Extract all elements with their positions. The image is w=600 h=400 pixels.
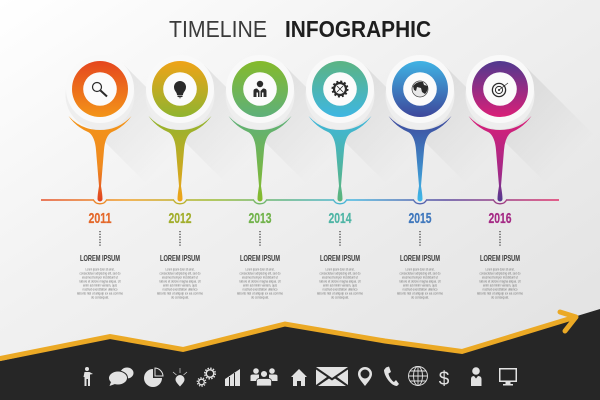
icon: magnifier bbox=[92, 82, 107, 96]
icon: light bulb bbox=[174, 81, 186, 98]
icon: gears bbox=[197, 368, 215, 386]
column 2014: consectetuer adipiscing elit, sed do bbox=[320, 272, 361, 276]
column 2012: do consequat. bbox=[171, 296, 189, 300]
title bbox=[169, 16, 431, 42]
column 2015: Lorem ipsum dolor sit amet, bbox=[406, 268, 435, 272]
column 2014 bbox=[317, 210, 363, 300]
icon: monitor bbox=[499, 368, 517, 386]
column 2012: eiusmod tempor incididunt ut bbox=[162, 276, 198, 280]
marker 2015 bbox=[386, 55, 454, 202]
column 2015: eiusmod tempor incididunt ut bbox=[402, 276, 438, 280]
column 2012: 2012 bbox=[168, 210, 192, 227]
icon: business person bbox=[254, 81, 266, 97]
column 2011: 2011 bbox=[88, 210, 112, 227]
column 2013: LOREM IPSUM bbox=[240, 253, 280, 263]
column 2013: eiusmod tempor incididunt ut bbox=[242, 276, 278, 280]
marker 2011 bbox=[66, 55, 134, 202]
column 2015: labore et dolore magna aliqua. Ut bbox=[400, 280, 441, 284]
column 2015: enim ad minim veniam, quis bbox=[403, 284, 437, 288]
column 2012: Lorem ipsum dolor sit amet, bbox=[166, 268, 195, 272]
column 2014: 2014 bbox=[328, 210, 352, 227]
icon: gear bbox=[332, 81, 348, 97]
title: TIMELINE bbox=[169, 16, 267, 42]
column 2015: laboris nisi ut aliquip ex ea commo bbox=[397, 292, 443, 296]
column 2016: laboris nisi ut aliquip ex ea commo bbox=[477, 292, 523, 296]
column 2011: labore et dolore magna aliqua. Ut bbox=[80, 280, 121, 284]
footer icon row bbox=[84, 366, 517, 390]
column 2012: consectetuer adipiscing elit, sed do bbox=[160, 272, 201, 276]
icon: location pin bbox=[358, 367, 372, 386]
column 2013: 2013 bbox=[248, 210, 272, 227]
column 2016: 2016 bbox=[488, 210, 512, 227]
column 2016 bbox=[477, 210, 523, 300]
icon: globe bbox=[408, 366, 428, 386]
column 2016: enim ad minim veniam, quis bbox=[483, 284, 517, 288]
column 2013: do consequat. bbox=[251, 296, 269, 300]
column 2012 bbox=[157, 210, 203, 300]
column 2016: consectetuer adipiscing elit, sed do bbox=[480, 272, 521, 276]
column 2013: enim ad minim veniam, quis bbox=[243, 284, 277, 288]
column 2011: eiusmod tempor incididunt ut bbox=[82, 276, 118, 280]
column 2016: eiusmod tempor incididunt ut bbox=[482, 276, 518, 280]
column 2015: consectetuer adipiscing elit, sed do bbox=[400, 272, 441, 276]
timeline line bbox=[41, 200, 559, 204]
column 2016: labore et dolore magna aliqua. Ut bbox=[480, 280, 521, 284]
marker 2013 bbox=[226, 55, 294, 202]
column 2013: laboris nisi ut aliquip ex ea commo bbox=[237, 292, 283, 296]
column 2012: laboris nisi ut aliquip ex ea commo bbox=[157, 292, 203, 296]
icon: house bbox=[291, 369, 307, 386]
column 2011: LOREM IPSUM bbox=[80, 253, 120, 263]
marker 2016 bbox=[466, 55, 534, 202]
column 2014: labore et dolore magna aliqua. Ut bbox=[320, 280, 361, 284]
icon: speech bubbles bbox=[108, 368, 134, 386]
column 2013: Lorem ipsum dolor sit amet, bbox=[246, 268, 275, 272]
icon: telephone bbox=[384, 366, 399, 386]
icon: group of people bbox=[250, 368, 278, 386]
column 2012: enim ad minim veniam, quis bbox=[163, 284, 197, 288]
column 2016: Lorem ipsum dolor sit amet, bbox=[486, 268, 515, 272]
column 2015: nostrud exercitation ullamco bbox=[402, 288, 438, 292]
column 2015 bbox=[397, 210, 443, 300]
column 2016: nostrud exercitation ullamco bbox=[482, 288, 518, 292]
column 2012: labore et dolore magna aliqua. Ut bbox=[160, 280, 201, 284]
marker 2014 bbox=[306, 55, 374, 202]
column 2011: enim ad minim veniam, quis bbox=[83, 284, 117, 288]
icon: pie chart bbox=[144, 368, 163, 387]
column 2011: laboris nisi ut aliquip ex ea commo bbox=[77, 292, 123, 296]
column 2015: LOREM IPSUM bbox=[400, 253, 440, 263]
icon: target bbox=[492, 83, 508, 97]
icon: envelope bbox=[316, 367, 348, 386]
column 2011: Lorem ipsum dolor sit amet, bbox=[86, 268, 115, 272]
column 2012: LOREM IPSUM bbox=[160, 253, 200, 263]
column 2014: eiusmod tempor incididunt ut bbox=[322, 276, 358, 280]
column 2014: nostrud exercitation ullamco bbox=[322, 288, 358, 292]
column 2015: 2015 bbox=[408, 210, 432, 227]
column 2014: enim ad minim veniam, quis bbox=[323, 284, 357, 288]
column 2011 bbox=[77, 210, 123, 300]
icon: bar chart bbox=[225, 369, 240, 386]
arrow: rising trend line bbox=[0, 312, 576, 359]
column 2014: LOREM IPSUM bbox=[320, 253, 360, 263]
icon: idea bulb bbox=[173, 368, 187, 386]
icon: standing person bbox=[84, 367, 93, 386]
column 2011: do consequat. bbox=[91, 296, 109, 300]
column 2016: do consequat. bbox=[491, 296, 509, 300]
icon: user bbox=[471, 367, 482, 386]
column 2016: LOREM IPSUM bbox=[480, 253, 520, 263]
marker 2012 bbox=[146, 55, 214, 202]
column 2014: do consequat. bbox=[331, 296, 349, 300]
column 2013: consectetuer adipiscing elit, sed do bbox=[240, 272, 281, 276]
column 2013: nostrud exercitation ullamco bbox=[242, 288, 278, 292]
title: INFOGRAPHIC bbox=[285, 16, 431, 42]
column 2015: do consequat. bbox=[411, 296, 429, 300]
column 2014: Lorem ipsum dolor sit amet, bbox=[326, 268, 355, 272]
column 2012: nostrud exercitation ullamco bbox=[162, 288, 198, 292]
column 2014: laboris nisi ut aliquip ex ea commo bbox=[317, 292, 363, 296]
icon: globe bbox=[412, 81, 428, 97]
column 2013: labore et dolore magna aliqua. Ut bbox=[240, 280, 281, 284]
column 2011: consectetuer adipiscing elit, sed do bbox=[80, 272, 121, 276]
long shadows behind the markers bbox=[76, 65, 595, 184]
dark footer band bbox=[0, 309, 600, 400]
icon: dollar sign: $ bbox=[439, 369, 450, 390]
column 2011: nostrud exercitation ullamco bbox=[82, 288, 118, 292]
column 2013 bbox=[237, 210, 283, 300]
